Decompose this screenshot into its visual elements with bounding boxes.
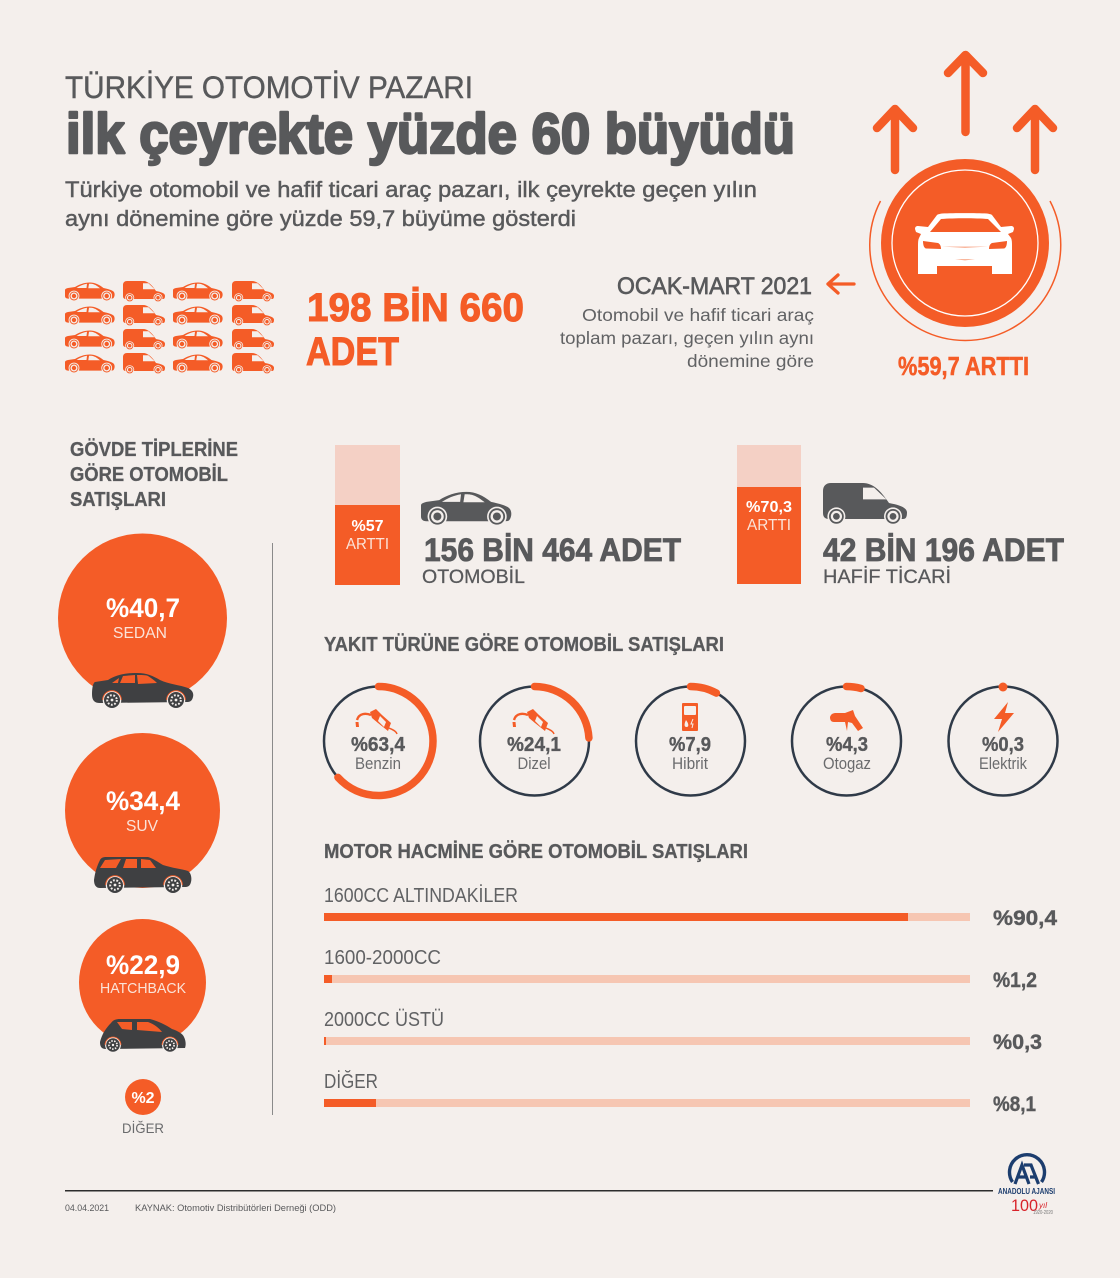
gauge: otogaz: %4,3 <box>826 734 868 756</box>
logo: anadolu ajansi: ANADOLU AJANSI <box>998 1186 1055 1196</box>
subtitle <box>65 177 757 231</box>
bubble: hatchback: HATCHBACK <box>100 981 186 997</box>
icon: fuel pump <box>356 709 397 734</box>
bar row: under 1600cc <box>324 884 1057 930</box>
bar: hafif ticari growth <box>737 445 801 584</box>
icon: car <box>421 492 511 526</box>
panel: otomobil <box>335 445 681 588</box>
heading: body types: SATIŞLARI <box>70 489 166 511</box>
icons: three up arrows <box>877 55 1053 170</box>
period description: Otomobil ve hafif ticari araç <box>582 305 814 325</box>
bar row: under 1600cc: %90,4 <box>993 906 1057 930</box>
gauge: elektrik <box>948 682 1058 796</box>
period text <box>560 273 814 371</box>
icon: lightning bolt <box>994 702 1014 732</box>
bubble: sedan: SEDAN <box>113 625 167 642</box>
logo: anadolu ajansi: 100 <box>1011 1196 1038 1215</box>
title line 2: ilk çeyrekte yüzde 60 büyüdü <box>66 102 795 166</box>
gauge: dizel: Dizel <box>518 754 550 773</box>
title line 1: TÜRKİYE OTOMOTİV PAZARI <box>65 69 473 105</box>
bubble: other: DİĞER <box>122 1119 164 1136</box>
icon: hatchback <box>100 1019 186 1053</box>
heading: body types: GÖVDE TİPLERİNE <box>70 438 238 461</box>
bubble: suv: SUV <box>126 818 158 835</box>
period description: dönemine göre <box>687 351 814 371</box>
bubble: suv: %34,4 <box>106 786 180 816</box>
heading: body types <box>70 438 238 511</box>
bar row: 1600-2000cc: %1,2 <box>993 968 1037 992</box>
heading: body types: GÖRE OTOMOBİL <box>70 463 228 486</box>
bubble: other: %2 <box>131 1090 155 1107</box>
icon: lpg nozzle <box>830 710 863 731</box>
bubble: hatchback: %22,9 <box>106 950 180 980</box>
icon: van <box>823 483 907 525</box>
otomobil label: OTOMOBİL <box>422 565 525 588</box>
gauge: benzin: %63,4 <box>351 734 406 756</box>
growth badge with car <box>870 159 1061 341</box>
bubble: suv <box>65 733 220 894</box>
footer rule <box>65 1190 993 1192</box>
bar: otomobil growth: ARTTI <box>346 536 389 553</box>
growth label: %59,7 ARTTI <box>898 353 1029 381</box>
bar: otomobil growth: %57 <box>351 518 384 535</box>
heading: fuel type: YAKIT TÜRÜNE GÖRE OTOMOBİL SATIŞLARI <box>324 633 724 656</box>
icon: car front <box>915 213 1014 274</box>
hafif ticari count: 42 BİN 196 ADET <box>823 532 1064 568</box>
bar: hafif ticari growth: ARTTI <box>747 517 791 534</box>
gauge: dizel: %24,1 <box>507 734 561 756</box>
footer: date and source: KAYNAK: Otomotiv Distribütörleri Derneği (ODD) <box>135 1203 336 1214</box>
bar row: over 2000cc: %0,3 <box>993 1030 1042 1054</box>
footer: date and source: 04.04.2021 <box>65 1203 109 1214</box>
hafif ticari label: HAFİF TİCARİ <box>823 565 951 588</box>
bubble: sedan: %40,7 <box>106 593 180 623</box>
gauge: elektrik: %0,3 <box>982 734 1024 756</box>
bar row: under 1600cc: 1600CC ALTINDAKİLER <box>324 884 518 907</box>
gauge: benzin <box>324 686 433 796</box>
gauge: hibrit: Hibrit <box>672 754 708 773</box>
logo: anadolu ajansi: 1920-2020 <box>1033 1210 1053 1216</box>
gauge: otogaz <box>792 686 901 796</box>
bar row: over 2000cc <box>324 1009 1042 1054</box>
header: title block <box>65 69 795 231</box>
gauge: benzin: Benzin <box>355 754 401 773</box>
subtitle: Türkiye otomobil ve hafif ticari araç pazarı, ilk çeyrekte geçen yılın <box>65 177 757 202</box>
subtitle: aynı dönemine göre yüzde 59,7 büyüme gösterdi <box>65 206 576 231</box>
total sales figure: 198 BİN 660 <box>307 286 524 330</box>
period heading: OCAK-MART 2021 <box>617 273 812 300</box>
panel: hafif ticari <box>737 445 1064 588</box>
bubble: other <box>122 1079 164 1136</box>
gauge: hibrit <box>636 686 745 796</box>
logo: anadolu ajansi <box>998 1155 1055 1216</box>
period description <box>560 305 814 371</box>
icon grid: cars and vans <box>65 281 274 374</box>
divider <box>272 543 273 1115</box>
bar: hafif ticari growth: %70,3 <box>746 499 792 516</box>
total sales figure: ADET <box>306 330 399 374</box>
icon: hybrid pump <box>682 703 698 731</box>
total sales figure <box>306 286 524 374</box>
bubble: sedan <box>58 534 227 709</box>
bar row: other: %8,1 <box>993 1092 1036 1116</box>
bar row: 1600-2000cc <box>324 947 1037 992</box>
bar row: other <box>324 1070 1036 1116</box>
arrow: pointing left to period text <box>828 275 854 293</box>
logo: anadolu ajansi: yıl <box>1038 1201 1047 1210</box>
bubble: hatchback <box>79 919 206 1053</box>
otomobil count: 156 BİN 464 ADET <box>424 532 681 568</box>
gauge: dizel <box>480 686 589 796</box>
heading: engine size: MOTOR HACMİNE GÖRE OTOMOBİL SATIŞLARI <box>324 840 748 863</box>
icon: fuel pump <box>512 709 554 734</box>
bar row: other: DİĞER <box>324 1070 378 1093</box>
bar row: 1600-2000cc: 1600-2000CC <box>324 947 441 969</box>
gauge: elektrik: Elektrik <box>979 754 1027 773</box>
icon: sedan car <box>92 673 193 709</box>
bar row: over 2000cc: 2000CC ÜSTÜ <box>324 1009 444 1031</box>
bar: otomobil growth <box>335 445 400 585</box>
gauge: otogaz: Otogaz <box>823 754 871 773</box>
period description: toplam pazarı, geçen yılın aynı <box>560 328 814 348</box>
icon: suv <box>94 857 191 894</box>
gauge: hibrit: %7,9 <box>669 734 711 756</box>
